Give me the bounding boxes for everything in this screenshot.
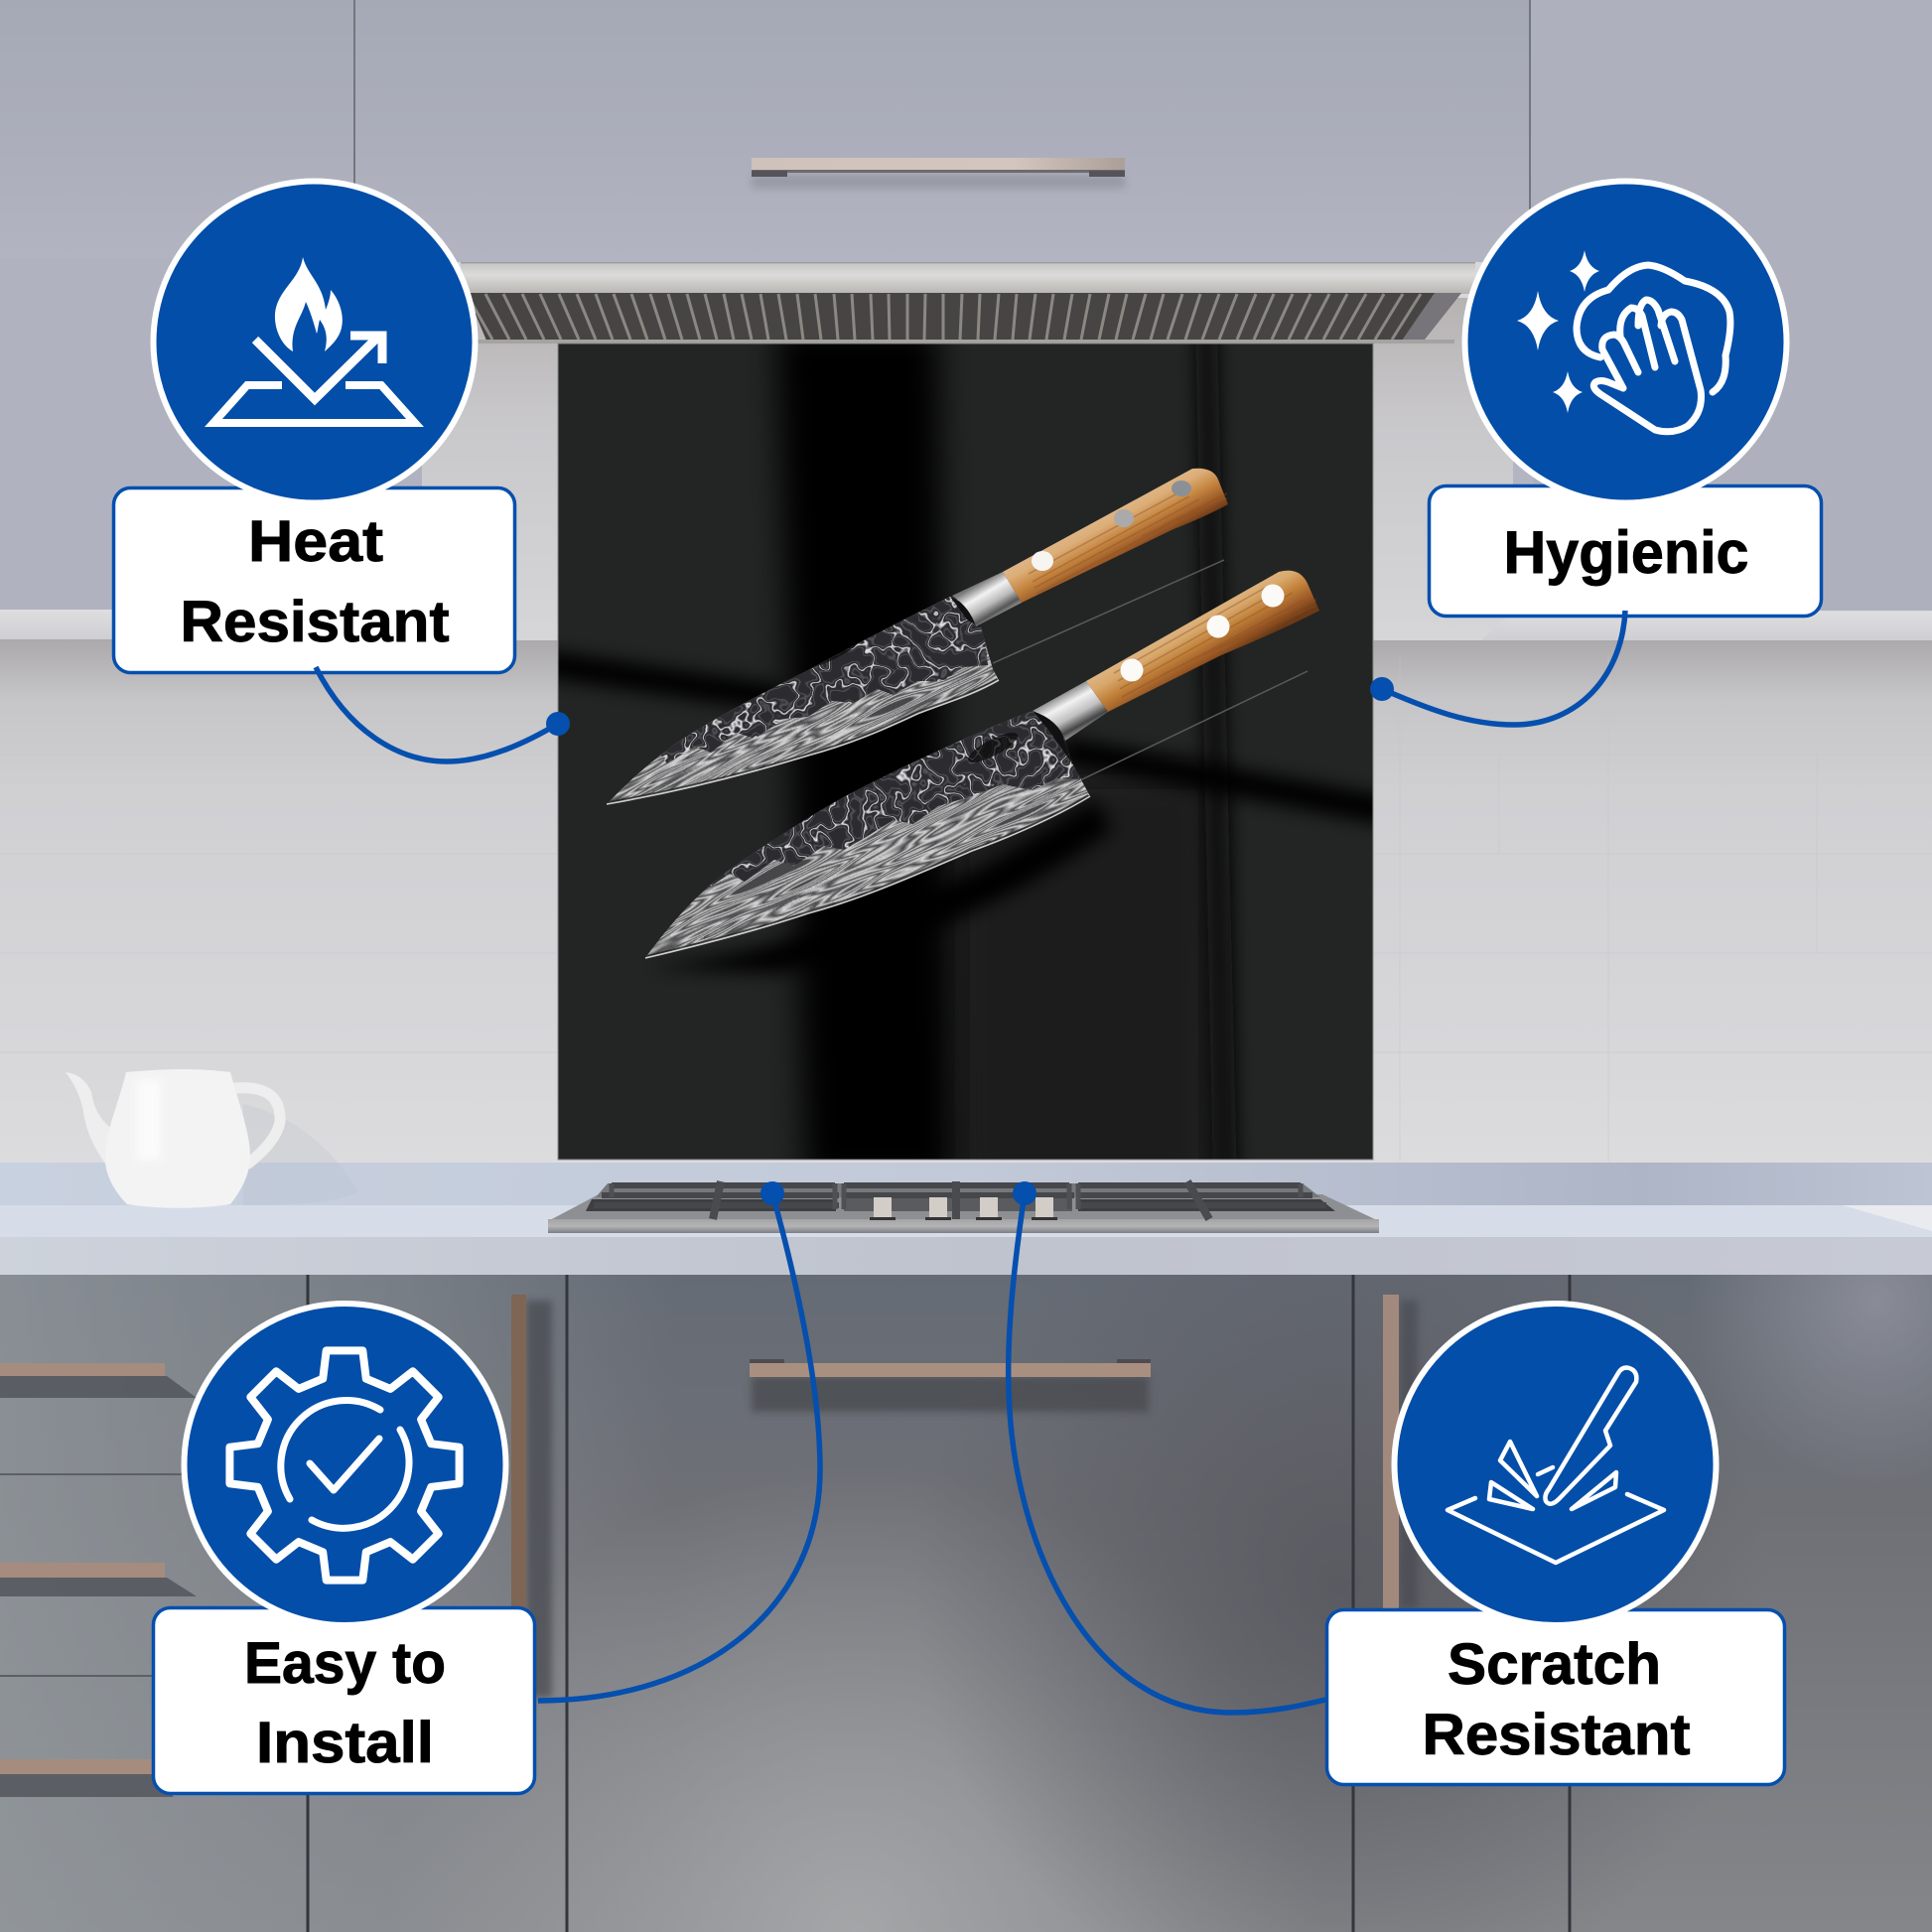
knife two bolster: [1033, 681, 1108, 741]
knife two pins: [1120, 584, 1285, 681]
label box: [153, 1608, 534, 1793]
upper left cabinet: [0, 0, 353, 262]
teapot spout: [66, 1072, 117, 1172]
callout: Heat Resistant: [113, 181, 570, 761]
connector dot: [1013, 1181, 1036, 1205]
teapot handle: [234, 1088, 280, 1164]
panel base: [558, 344, 1373, 1160]
connector dot: [546, 712, 570, 736]
hob supports: [713, 1181, 1209, 1219]
lower centre bottom highlight: [387, 1465, 1320, 1932]
vertical handle right: [1383, 1295, 1399, 1622]
cabinet bottom strip right: [1481, 612, 1932, 640]
label text: Heat: [248, 509, 383, 574]
knife shadow: [645, 800, 1112, 973]
wall tile joints: [0, 655, 1932, 1162]
knife one blade: [608, 597, 999, 803]
knife two edge line: [645, 796, 1090, 958]
knife two handle: [1086, 571, 1319, 712]
teapot body: [105, 1069, 250, 1208]
knife one wood grain: [1029, 493, 1227, 594]
counter back strip: [0, 1163, 1932, 1205]
upper centre cabinet: [355, 0, 1529, 262]
knife one bolster: [952, 572, 1022, 626]
wall beside panel: [417, 298, 1519, 640]
knife two edge shade: [645, 798, 1090, 960]
panel border: [558, 344, 1373, 1160]
vertical handle right shadow: [1400, 1301, 1418, 1608]
icon badge: [153, 181, 475, 502]
vertical handle left: [511, 1295, 526, 1622]
knife two maker mark: [968, 733, 1018, 762]
lower right shade: [913, 1275, 1767, 1932]
knives: [606, 469, 1319, 959]
drawer handle shadows: [0, 1376, 197, 1797]
connector line: [1382, 611, 1625, 725]
cabinet joints: [354, 0, 1530, 262]
extractor hood grille: [467, 293, 1461, 344]
hob centre recess: [844, 1197, 1072, 1211]
hob grate ends: [612, 1183, 1301, 1209]
teapot shadow: [243, 1104, 357, 1205]
reflection lower dim area: [967, 786, 1201, 1160]
knife one pins: [1032, 481, 1191, 571]
connector dot: [1370, 677, 1394, 701]
label text: Hygienic: [1503, 519, 1749, 586]
callout: Easy to Install: [153, 1181, 820, 1793]
callout: Scratch Resistant: [1009, 1181, 1785, 1785]
icon badge: [1394, 1304, 1716, 1625]
drawer lines: [0, 1474, 308, 1676]
label box: [1430, 486, 1821, 616]
centre handle: [750, 1363, 1151, 1377]
label text: Scratch: [1448, 1632, 1661, 1697]
label text: Install: [256, 1711, 434, 1775]
lower cabinets: [0, 1275, 1932, 1932]
knife two etched cells: [704, 711, 1081, 892]
connector line: [1009, 1193, 1325, 1713]
knife two: [645, 570, 1319, 959]
knife one etched cells: [661, 597, 988, 763]
knife one edge shade: [607, 682, 999, 806]
hob: [548, 1181, 1379, 1233]
label text: Easy to: [244, 1631, 446, 1696]
knife one handle: [1003, 469, 1228, 603]
vertical handle left shadow: [526, 1301, 552, 1698]
drawer handles: [0, 1363, 165, 1774]
reflected lines: [993, 560, 1308, 780]
hob grate backing: [596, 1183, 1320, 1197]
icon badge: [1465, 181, 1787, 502]
upper right cabinet edge: [1513, 262, 1533, 611]
knife one edge line: [607, 680, 999, 804]
counter top: [0, 1205, 1932, 1237]
knife one: [606, 469, 1228, 805]
cabinet bottom strip left: [0, 610, 455, 639]
knife two wood grain: [1114, 587, 1316, 697]
reflection column: [776, 328, 953, 1181]
reflection thin column: [1195, 328, 1237, 1181]
hob knob bases: [870, 1217, 1057, 1220]
label box: [113, 488, 514, 673]
upper left cabinet lower part: [0, 258, 422, 611]
cabinet gaps: [308, 1275, 1570, 1932]
centre handle shadow: [752, 1376, 1149, 1412]
hob knobs: [874, 1197, 1053, 1217]
reflection right band: [1062, 737, 1390, 826]
connector dot: [760, 1181, 784, 1205]
connector line: [538, 1193, 820, 1701]
counter front edge: [0, 1237, 1932, 1275]
knife two shoulder shade: [1033, 711, 1072, 763]
icon: gear with check: [229, 1350, 460, 1581]
icon: hand wiping with sparkles: [1517, 250, 1730, 432]
label text: Resistant: [181, 590, 449, 654]
teapot: [66, 1069, 357, 1208]
extractor hood band: [461, 262, 1475, 294]
label box: [1326, 1610, 1785, 1785]
centre handle top shade: [750, 1359, 1151, 1363]
icon badge: [185, 1304, 506, 1625]
knife two blade: [645, 711, 1090, 957]
knife one maker mark: [814, 643, 858, 667]
top handle: [752, 158, 1125, 189]
knife one shoulder shade: [950, 597, 981, 627]
teapot highlight: [137, 1080, 161, 1160]
lower right corner light: [1688, 1275, 1932, 1489]
label text: Resistant: [1422, 1703, 1690, 1767]
counter right accessory: [1843, 1205, 1932, 1231]
hob grates: [594, 1185, 1326, 1205]
lower left lighter area: [0, 1275, 675, 1932]
icon: flame over surface with arrow: [213, 257, 415, 423]
wall: [0, 635, 1932, 1172]
icon: knife scratching surface: [1448, 1368, 1664, 1563]
hob plate: [548, 1194, 1379, 1221]
upper right cabinet: [1531, 0, 1932, 611]
connector line: [316, 667, 558, 761]
hob recesses: [586, 1199, 1335, 1211]
reflection left band: [541, 649, 784, 713]
callout: Hygienic: [1370, 181, 1821, 725]
glass splashback panel: [541, 328, 1390, 1191]
